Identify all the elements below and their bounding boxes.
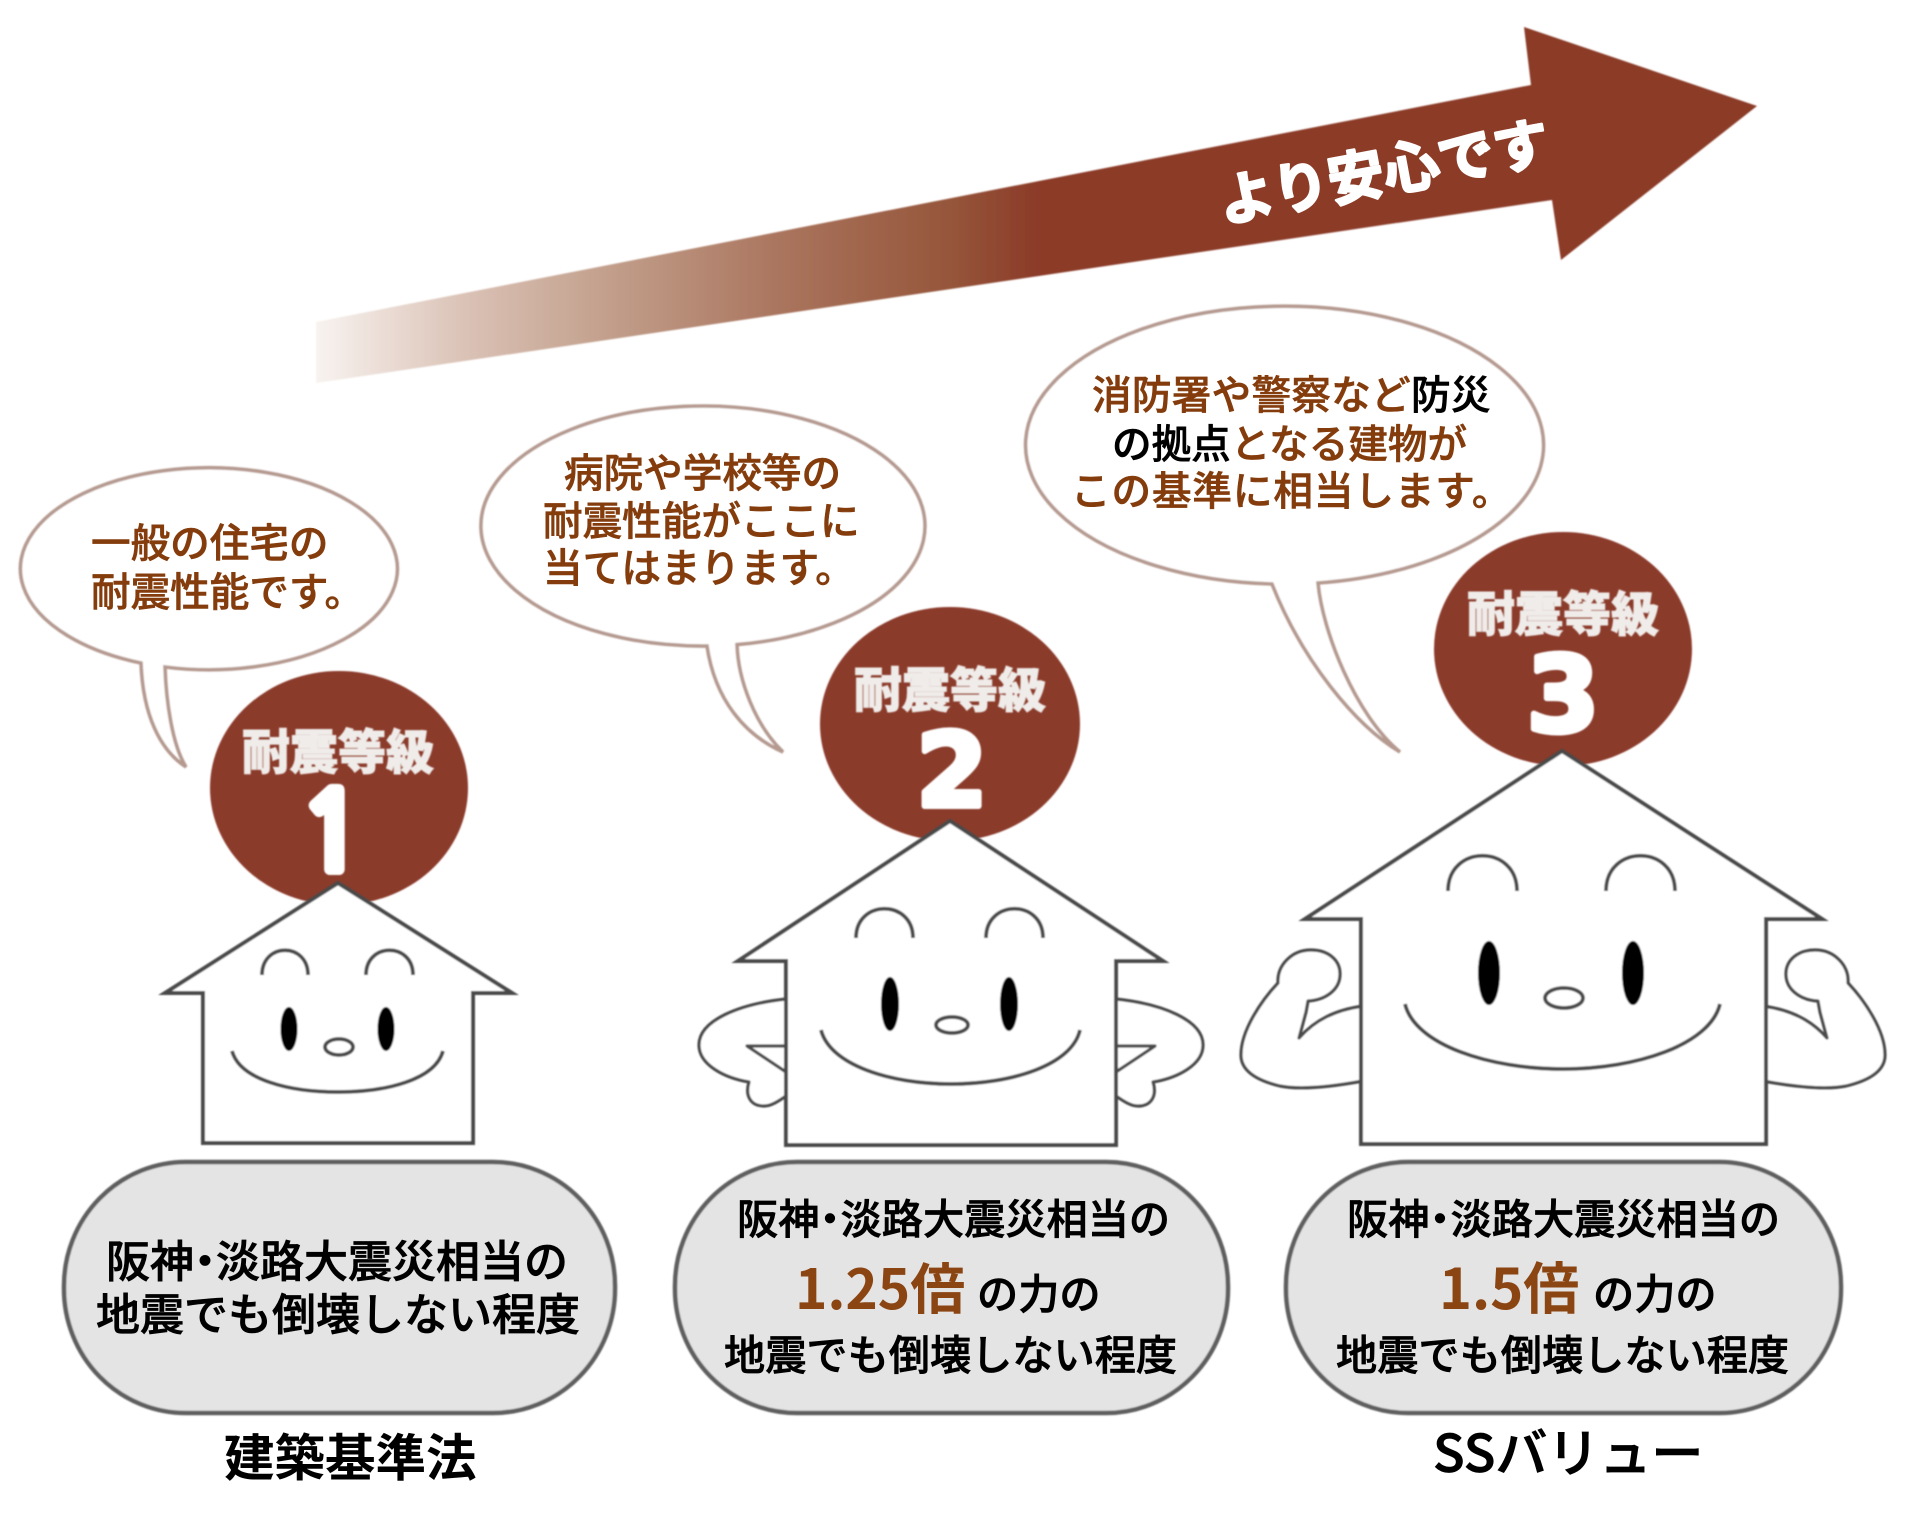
speech bubble: grade 3 — [1026, 306, 1544, 752]
bubble text: 当てはまります。 — [543, 547, 855, 591]
speech bubble: grade 1 — [20, 468, 397, 767]
arrow: increasing safety — [316, 27, 1757, 383]
badge: grade 3 — [1434, 532, 1692, 766]
eyebrows — [856, 909, 1043, 938]
badge: grade 2 — [820, 607, 1080, 841]
nose — [936, 1017, 968, 1033]
bubble text: 病院や学校等の — [564, 452, 841, 496]
badge number: 3 — [1527, 634, 1599, 756]
right arm — [1763, 950, 1885, 1088]
bubble text: 耐震性能がここに — [543, 500, 860, 544]
caption: building standard law: 建築基準法 — [224, 1430, 476, 1487]
badge number: 1 — [299, 780, 365, 887]
badge circle — [820, 607, 1080, 841]
arrow text: より安心です — [1214, 111, 1554, 234]
speech bubble: grade 2 — [481, 406, 925, 752]
left arm — [699, 999, 786, 1106]
bubble text: 耐震性能です。 — [91, 571, 364, 615]
pill text line 1: 阪神 — [1347, 1197, 1429, 1243]
badge circle — [210, 671, 468, 905]
eyes — [280, 1007, 394, 1051]
multiplier 1.5: 1.5倍 — [1439, 1245, 1579, 1326]
bubble text: の拠点となる建物が — [1112, 423, 1467, 467]
pill text line 2: の力の — [1593, 1272, 1717, 1318]
eyebrows — [1448, 856, 1675, 891]
mouth — [821, 1030, 1080, 1084]
pill text line 1: ・淡路大震災相当の — [809, 1197, 1170, 1243]
nose — [1545, 988, 1583, 1008]
bubble text: 一般の住宅の — [91, 522, 328, 566]
pill text: 阪神 — [106, 1238, 194, 1287]
right arm — [1116, 999, 1203, 1106]
pill background — [64, 1162, 615, 1413]
pill text line 2: の力の — [977, 1272, 1101, 1318]
house character: grade 2 — [699, 821, 1203, 1145]
bubble text: 消防署や警察など防災 — [1092, 374, 1491, 418]
pill text line 1: 阪神 — [737, 1197, 819, 1243]
bubble text: この基準に相当します。 — [1071, 470, 1512, 514]
pill text line 3: 地震でも倒壊しない程度 — [1336, 1333, 1789, 1379]
pill text line 3: 地震でも倒壊しない程度 — [724, 1333, 1177, 1379]
nose — [325, 1039, 353, 1055]
badge number: 2 — [917, 712, 987, 831]
house body — [1305, 751, 1822, 1144]
eyes — [1478, 941, 1644, 1005]
bubble outline — [1026, 306, 1544, 752]
pill text: ・淡路大震災相当の — [183, 1238, 568, 1287]
mouth — [232, 1051, 443, 1092]
house body — [165, 883, 512, 1143]
left arm — [1241, 950, 1363, 1088]
eyebrows — [262, 950, 413, 975]
multiplier 1.25: 1.25倍 — [795, 1245, 965, 1325]
badge: grade 1 — [210, 671, 468, 905]
eyes — [881, 977, 1018, 1031]
panel: grade 2 description — [675, 1162, 1228, 1413]
caption: SS value: SSバリュー — [1433, 1412, 1703, 1487]
pill background — [675, 1162, 1228, 1413]
pill text: 地震でも倒壊しない程度 — [96, 1291, 580, 1340]
house character: grade 1 — [165, 883, 512, 1143]
panel: grade 3 description — [1286, 1162, 1841, 1413]
badge label: 耐震等級 — [1467, 589, 1659, 642]
house character: grade 3 — [1241, 751, 1885, 1144]
badge circle — [1434, 532, 1692, 766]
badge label: 耐震等級 — [854, 665, 1046, 718]
bubble outline — [481, 406, 925, 752]
house body — [738, 821, 1163, 1145]
bubble outline — [20, 468, 397, 767]
arrow shape — [316, 27, 1757, 383]
badge label: 耐震等級 — [242, 727, 434, 780]
pill background — [1286, 1162, 1841, 1413]
panel: grade 1 description — [64, 1162, 615, 1413]
mouth — [1405, 1004, 1720, 1069]
pill text line 1: ・淡路大震災相当の — [1419, 1197, 1780, 1243]
